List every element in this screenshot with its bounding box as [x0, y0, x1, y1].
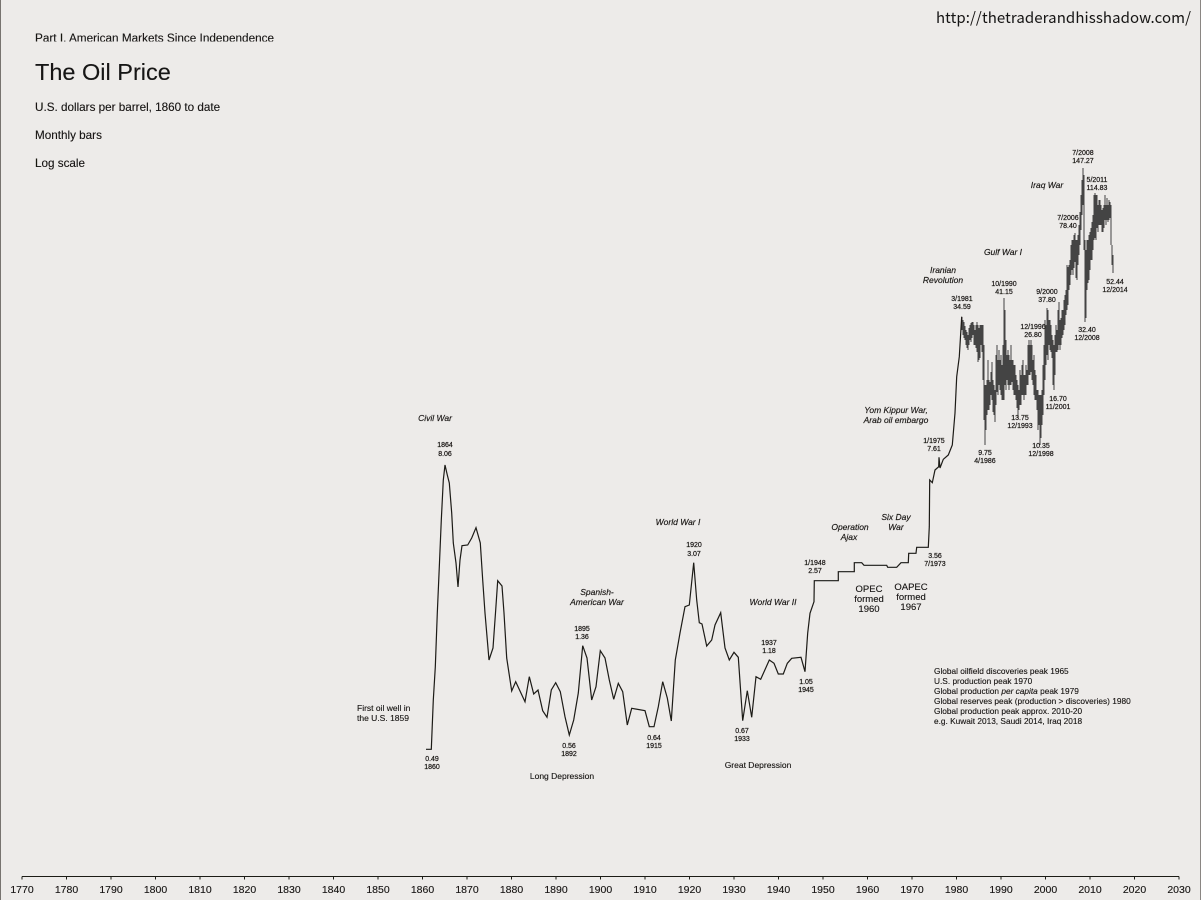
time axis: 1950	[811, 884, 835, 896]
point 1998: 12/1998	[1028, 451, 1054, 458]
time axis: 1930	[722, 884, 746, 896]
point 1996: 26.80	[1024, 332, 1042, 339]
point 1993	[1007, 415, 1033, 430]
time axis: 1860	[411, 884, 434, 896]
point 1864	[437, 442, 453, 458]
event: oapec: OAPEC	[894, 582, 928, 593]
peak notes text block: e.g. Kuwait 2013, Saudi 2014, Iraq 2018	[934, 716, 1082, 726]
peak notes text block	[934, 666, 1131, 726]
point 2008 peak: 7/2008	[1072, 150, 1094, 157]
time axis: 1980	[945, 884, 968, 896]
point 2011: 5/2011	[1087, 177, 1108, 184]
time axis: 2030	[1167, 884, 1191, 896]
point 1920: 3.07	[687, 551, 701, 558]
point 2006	[1057, 215, 1079, 230]
peak notes text block: Global reserves peak (production > discoveries) 1980	[934, 696, 1131, 706]
point 1948: 1/1948	[804, 560, 826, 567]
point 2008 peak	[1072, 150, 1094, 165]
event: operation ajax	[831, 522, 869, 542]
event: first well: First oil well in	[357, 703, 411, 713]
time axis: 2020	[1123, 884, 1146, 896]
event: iraq war: Iraq War	[1031, 180, 1064, 190]
point 1860: 1860	[424, 764, 440, 771]
event: spanish-american war: Spanish-	[580, 587, 614, 597]
time axis: 1790	[99, 884, 123, 896]
event: opec	[854, 584, 884, 615]
point 1986	[974, 450, 996, 465]
point 1948	[804, 560, 826, 575]
event: civil war: Civil War	[418, 413, 453, 423]
point 1892	[561, 743, 577, 758]
time axis: 1840	[322, 884, 345, 896]
subtitle: bars: Monthly bars	[35, 129, 102, 142]
point 1993: 12/1993	[1007, 423, 1033, 430]
point 1920: 1920	[686, 542, 702, 549]
point 1895: 1895	[574, 626, 590, 633]
point 2001: 16.70	[1049, 396, 1067, 403]
point 1973: 7/1973	[924, 561, 946, 568]
point 1948: 2.57	[808, 568, 822, 575]
point 1915: 1915	[646, 743, 662, 750]
point 1975	[923, 438, 945, 453]
point 1981	[951, 296, 973, 311]
point 1975: 1/1975	[923, 438, 945, 445]
time axis: 2000	[1034, 884, 1057, 896]
point 1990: 41.15	[995, 289, 1013, 296]
point 2008 low: 12/2008	[1074, 335, 1100, 342]
event: iranian revolution: Revolution	[923, 275, 963, 285]
time axis: 1820	[233, 884, 256, 896]
point 1998	[1028, 443, 1054, 458]
point 2011	[1087, 177, 1108, 192]
point 1945	[798, 679, 814, 694]
title: The Oil Price	[35, 59, 171, 85]
point 1996: 12/1996	[1020, 324, 1046, 331]
series heading: Part I. American Markets Since Independence	[35, 32, 275, 45]
time axis: 1770	[10, 884, 34, 896]
event: opec: 1960	[858, 604, 880, 615]
event: six day war	[881, 512, 911, 532]
event: iranian revolution	[923, 265, 963, 285]
point 1937: 1937	[761, 640, 777, 647]
point 1933: 1933	[734, 736, 750, 743]
event: six day war: War	[888, 522, 905, 532]
point 2000: 9/2000	[1036, 289, 1058, 296]
event: gulf war: Gulf War I	[984, 247, 1023, 257]
point 1860	[424, 756, 440, 771]
event: yom kippur	[863, 405, 929, 425]
event: long depression: Long Depression	[530, 771, 594, 781]
time axis: 1900	[589, 884, 612, 896]
event: opec: OPEC	[856, 584, 883, 595]
event: iranian revolution: Iranian	[930, 265, 956, 275]
source URL: http://thetraderandhisshadow.com/	[936, 7, 1191, 28]
point 2014: 12/2014	[1102, 287, 1128, 294]
point 1973	[924, 553, 946, 568]
time axis: 1940	[767, 884, 790, 896]
event: first well	[357, 703, 411, 723]
point 1892: 0.56	[562, 743, 576, 750]
point 1915: 0.64	[647, 735, 661, 742]
header text block	[35, 32, 275, 170]
time axis: 1830	[277, 884, 301, 896]
point 2006: 7/2006	[1057, 215, 1079, 222]
event: opec: formed	[854, 594, 884, 605]
point 1937: 1.18	[762, 648, 776, 655]
peak notes text block: Global production per capita peak 1979	[934, 686, 1079, 696]
line chart: oil price	[426, 168, 1113, 749]
point 2008 peak: 147.27	[1072, 158, 1094, 165]
point 2011: 114.83	[1087, 185, 1108, 192]
event: oapec	[894, 582, 928, 613]
time axis: 1910	[633, 884, 657, 896]
point 1981: 34.59	[953, 304, 971, 311]
point 1975: 7.61	[927, 446, 941, 453]
point 1993: 13.75	[1011, 415, 1029, 422]
event: yom kippur: Yom Kippur War,	[864, 405, 928, 415]
time axis: 1920	[678, 884, 701, 896]
event: spanish-american war	[569, 587, 625, 607]
event: first well: the U.S. 1859	[357, 713, 409, 723]
peak notes text block: Global production peak approx. 2010-20	[934, 706, 1082, 716]
point 1864: 8.06	[438, 451, 452, 458]
point 1998: 10.35	[1032, 443, 1050, 450]
point 2001	[1046, 396, 1070, 411]
point 1933	[734, 728, 750, 743]
point 2000: 37.80	[1038, 297, 1056, 304]
point 1895: 1.36	[575, 634, 589, 641]
point 1895	[574, 626, 590, 641]
time axis: 1810	[188, 884, 212, 896]
point 1933: 0.67	[735, 728, 749, 735]
point 1864: 1864	[437, 442, 453, 449]
point 2000	[1036, 289, 1058, 304]
time axis: 1850	[366, 884, 390, 896]
point 2001: 11/2001	[1046, 404, 1070, 411]
point 1990	[991, 281, 1017, 296]
time axis: 1800	[144, 884, 167, 896]
time axis: 1780	[55, 884, 78, 896]
event labels	[357, 180, 1064, 781]
event: operation ajax: Operation	[831, 522, 869, 532]
time axis: 1960	[856, 884, 879, 896]
time axis: 1890	[544, 884, 568, 896]
event: great depression: Great Depression	[725, 760, 792, 770]
event: yom kippur: Arab oil embargo	[863, 415, 929, 425]
peak notes text block: Global oilfield discoveries peak 1965	[934, 666, 1069, 676]
peak notes text block: U.S. production peak 1970	[934, 676, 1033, 686]
event: oapec: 1967	[900, 602, 922, 613]
point 1981: 3/1981	[951, 296, 973, 303]
event: operation ajax: Ajax	[840, 532, 858, 542]
point 1990: 10/1990	[991, 281, 1017, 288]
event: world war one: World War I	[656, 517, 701, 527]
point 1986: 4/1986	[974, 458, 996, 465]
point 2014	[1102, 279, 1128, 294]
event: six day war: Six Day	[881, 512, 911, 522]
event: oapec: formed	[896, 592, 926, 603]
point 2008 low: 32.40	[1078, 327, 1096, 334]
subtitle: scale: Log scale	[35, 157, 85, 170]
point 1986: 9.75	[978, 450, 992, 457]
subtitle: units: U.S. dollars per barrel, 1860 to date	[35, 101, 220, 114]
point 1937	[761, 640, 777, 655]
time axis: 1990	[989, 884, 1013, 896]
price annotations	[424, 150, 1128, 771]
point 2014: 52.44	[1106, 279, 1124, 286]
point 1915	[646, 735, 662, 750]
point 1892: 1892	[561, 751, 577, 758]
point 1860: 0.49	[425, 756, 439, 763]
point 1920	[686, 542, 702, 558]
point 1973: 3.56	[928, 553, 942, 560]
point 1945: 1945	[798, 687, 814, 694]
point 1945: 1.05	[799, 679, 813, 686]
point 2008 low	[1074, 327, 1100, 342]
time axis: 1880	[500, 884, 523, 896]
time axis: 2010	[1078, 884, 1102, 896]
event: spanish-american war: American War	[569, 597, 625, 607]
event: world war two: World War II	[749, 597, 797, 607]
point 2006: 78.40	[1059, 223, 1077, 230]
time axis	[10, 876, 1191, 896]
point 1996	[1020, 324, 1046, 339]
time axis: 1870	[455, 884, 479, 896]
time axis: 1970	[900, 884, 924, 896]
